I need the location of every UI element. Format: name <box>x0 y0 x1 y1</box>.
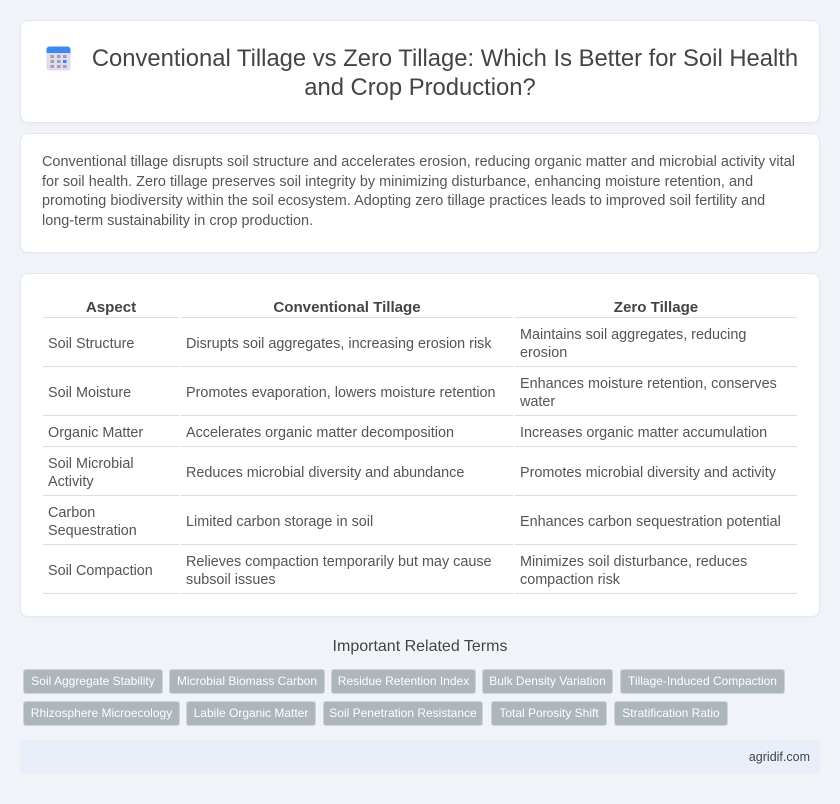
tag: Soil Aggregate Stability <box>31 674 155 688</box>
tag <box>614 701 728 726</box>
comparison table: Aspect <box>86 298 136 316</box>
tag: Total Porosity Shift <box>499 706 599 720</box>
title <box>92 45 798 101</box>
tag <box>323 701 483 726</box>
comparison table: Soil Moisture <box>48 385 131 401</box>
comparison table: Carbon <box>48 505 95 521</box>
comparison table: Conventional Tillage <box>273 298 421 316</box>
comparison table: Enhances carbon sequestration potential <box>520 514 781 530</box>
comparison table: Maintains soil aggregates, reducing <box>520 327 746 343</box>
heading: related terms: Important Related Terms <box>333 638 507 655</box>
intro text <box>42 154 795 228</box>
panel: header <box>20 20 820 123</box>
comparison table: Soil Compaction <box>48 563 153 579</box>
intro text: promoting biodiversity within the soil ecosystem. Adopting zero tillage practices leads to improved soil fertility and <box>42 193 765 209</box>
tag <box>620 669 785 694</box>
comparison table: Enhances moisture retention, conserves <box>520 376 777 392</box>
icon: calendar <box>46 46 70 70</box>
intro text: Conventional tillage disrupts soil structure and accelerates erosion, reducing organic matter and microbial activity vital <box>42 154 795 170</box>
title: Conventional Tillage vs Zero Tillage: Which Is Better for Soil Health <box>92 45 798 72</box>
comparison table: Sequestration <box>48 523 137 539</box>
comparison table: Promotes microbial diversity and activity <box>520 465 776 481</box>
panel: introduction <box>20 133 820 253</box>
tag <box>169 669 325 694</box>
comparison table: Reduces microbial diversity and abundance <box>186 465 464 481</box>
comparison table: Promotes evaporation, lowers moisture retention <box>186 385 496 401</box>
comparison table: Minimizes soil disturbance, reduces <box>520 554 747 570</box>
tag <box>491 701 607 726</box>
comparison table: compaction risk <box>520 572 620 588</box>
comparison table: Increases organic matter accumulation <box>520 425 767 441</box>
tag <box>186 701 316 726</box>
tag <box>331 669 476 694</box>
comparison table <box>43 298 797 594</box>
tag <box>482 669 613 694</box>
comparison table: Relieves compaction temporarily but may cause <box>186 554 492 570</box>
title: and Crop Production? <box>304 74 536 101</box>
footer <box>20 740 820 774</box>
comparison table: erosion <box>520 345 567 361</box>
intro text: long-term sustainability in crop production. <box>42 212 313 228</box>
comparison table: Accelerates organic matter decomposition <box>186 425 454 441</box>
footer source: agridif.com <box>749 750 810 764</box>
comparison table: Soil Microbial <box>48 456 134 472</box>
related terms tags <box>23 669 785 726</box>
tag: Residue Retention Index <box>338 674 469 688</box>
tag: Labile Organic Matter <box>194 706 308 720</box>
tag <box>23 669 163 694</box>
intro text: for soil health. Zero tillage preserves soil integrity by minimizing disturbance, enhancing moisture retention, and <box>42 174 753 190</box>
tag: Soil Penetration Resistance <box>329 706 477 720</box>
comparison table: Limited carbon storage in soil <box>186 514 373 530</box>
tag: Rhizosphere Microecology <box>31 706 172 720</box>
tag: Stratification Ratio <box>622 706 720 720</box>
comparison table: Disrupts soil aggregates, increasing erosion risk <box>186 336 492 352</box>
comparison table: water <box>520 394 555 410</box>
tag: Bulk Density Variation <box>489 674 606 688</box>
comparison table: Zero Tillage <box>614 298 698 316</box>
tag: Microbial Biomass Carbon <box>177 674 317 688</box>
comparison table: Organic Matter <box>48 425 143 441</box>
panel: comparison table <box>20 273 820 617</box>
tag <box>23 701 180 726</box>
comparison table: subsoil issues <box>186 572 276 588</box>
comparison table: Activity <box>48 474 94 490</box>
tag: Tillage-Induced Compaction <box>628 674 777 688</box>
comparison table: Soil Structure <box>48 336 134 352</box>
